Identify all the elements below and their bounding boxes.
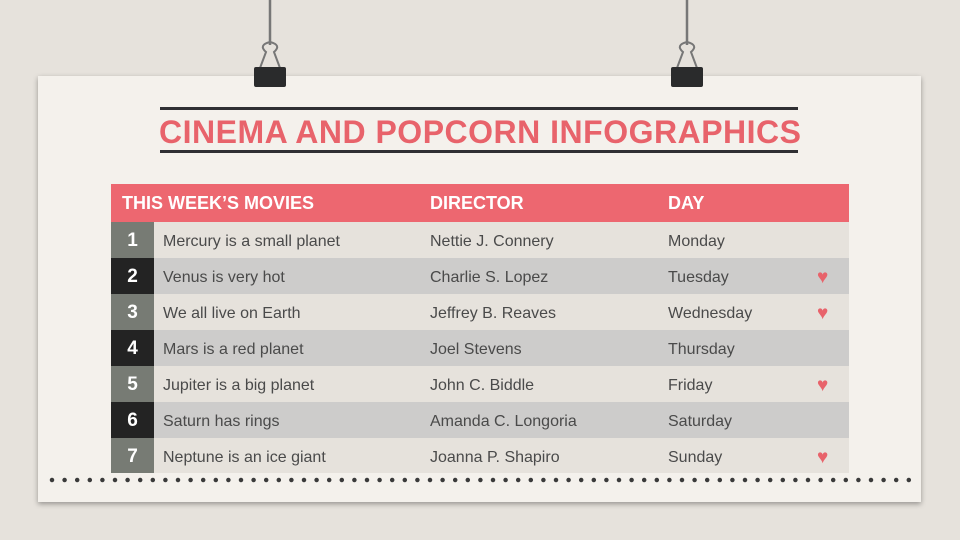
row 6: Saturn has rings	[163, 413, 280, 430]
row 1: Nettie J. Connery	[430, 233, 554, 250]
row 4: Thursday	[668, 341, 735, 358]
row 1: Monday	[668, 233, 725, 250]
row 7: Joanna P. Shapiro	[430, 449, 560, 466]
row 4: 4	[127, 338, 138, 359]
row 3: Wednesday	[668, 305, 752, 322]
row 2: 2	[127, 266, 138, 287]
row 4	[111, 330, 849, 366]
row 4: Joel Stevens	[430, 341, 522, 358]
row 2: Charlie S. Lopez	[430, 269, 548, 286]
row 7: ♥	[817, 447, 828, 468]
row 1	[111, 222, 849, 258]
row 3: Jeffrey B. Reaves	[430, 305, 556, 322]
table header	[111, 184, 849, 222]
row 5: Jupiter is a big planet	[163, 377, 314, 394]
row 7: 7	[127, 446, 138, 467]
row 5: ♥	[817, 375, 828, 396]
row 4: Mars is a red planet	[163, 341, 304, 358]
row 1: Mercury is a small planet	[163, 233, 340, 250]
row 7: Sunday	[668, 449, 722, 466]
row 5: 5	[127, 374, 138, 395]
row 3: ♥	[817, 303, 828, 324]
row 5: John C. Biddle	[430, 377, 534, 394]
table header: THIS WEEK’S MOVIES	[122, 193, 314, 213]
row 6: Amanda C. Longoria	[430, 413, 577, 430]
panel: card	[38, 76, 921, 502]
row 2: Venus is very hot	[163, 269, 285, 286]
row 5: Friday	[668, 377, 712, 394]
row 2: Tuesday	[668, 269, 729, 286]
icon: right binder clip	[671, 0, 703, 87]
row 1: 1	[127, 230, 138, 251]
title: CINEMA AND POPCORN INFOGRAPHICS	[159, 114, 801, 150]
row 6: 6	[127, 410, 138, 431]
row 3	[111, 294, 849, 330]
row 2: ♥	[817, 267, 828, 288]
table header: DAY	[668, 193, 704, 213]
row 6	[111, 402, 849, 438]
row 5	[111, 366, 849, 402]
row 2	[111, 258, 849, 294]
row 3: We all live on Earth	[163, 305, 301, 322]
table header: DIRECTOR	[430, 193, 524, 213]
row 3: 3	[127, 302, 138, 323]
icon: left binder clip	[254, 0, 286, 87]
row 7: Neptune is an ice giant	[163, 449, 326, 466]
row 7	[111, 438, 849, 473]
dotted line	[50, 478, 911, 482]
row 6: Saturday	[668, 413, 732, 430]
